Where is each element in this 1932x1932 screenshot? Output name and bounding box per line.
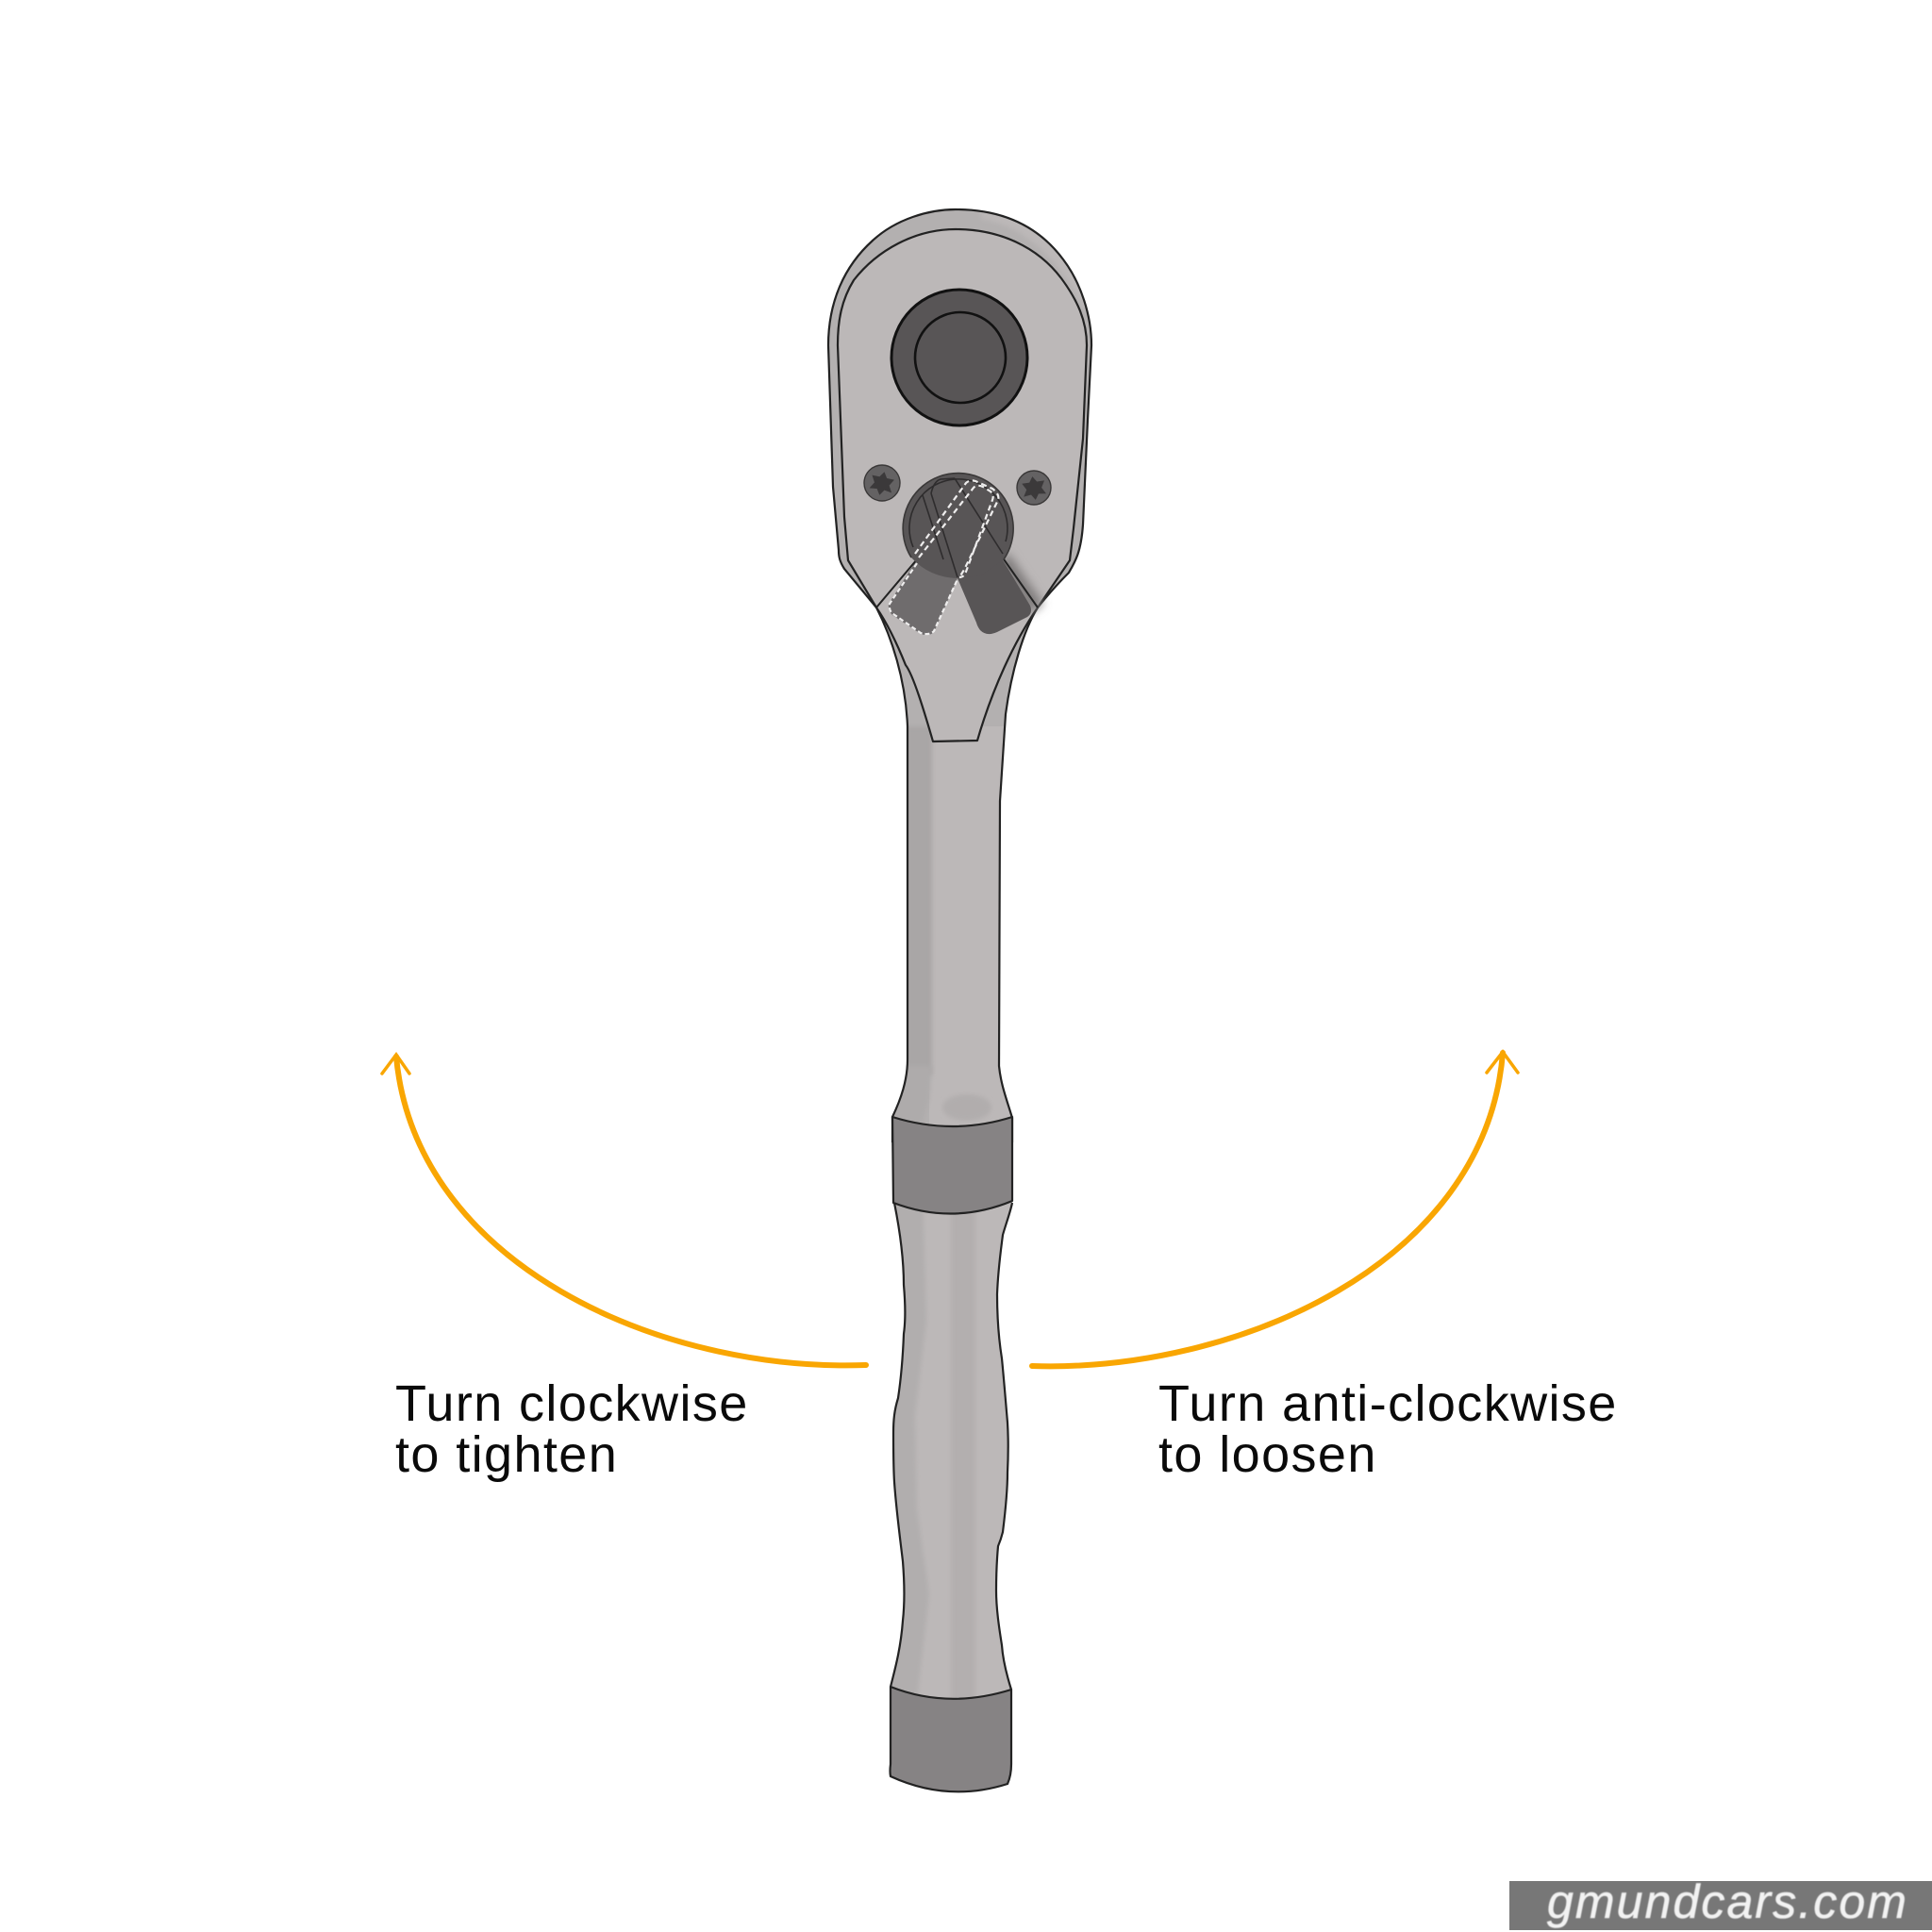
right torx screw bbox=[1017, 471, 1051, 505]
socket drive bbox=[891, 290, 1027, 425]
shadow of direction lever bbox=[1000, 552, 1043, 613]
label: anti-clockwise: Turn anti-clockwise bbox=[1158, 1375, 1618, 1432]
head face plate bbox=[838, 229, 1087, 741]
dark lever bbox=[958, 538, 1031, 634]
wrench head and shaft body bbox=[828, 203, 1099, 1146]
label: clockwise: Turn clockwise bbox=[395, 1375, 749, 1432]
left torx screw bbox=[864, 465, 900, 501]
label: clockwise: to tighten bbox=[395, 1426, 618, 1483]
selector knob bbox=[903, 474, 1013, 578]
arrow: clockwise bbox=[382, 1055, 866, 1365]
light lever position, dashed outline bbox=[889, 559, 958, 635]
first collar bbox=[892, 1117, 1012, 1214]
arrow: anti-clockwise bbox=[1032, 1052, 1518, 1366]
watermark: gmundcars.com bbox=[1547, 1875, 1908, 1928]
label: anti-clockwise: to loosen bbox=[1158, 1426, 1377, 1483]
ratchet wrench bbox=[828, 203, 1099, 1791]
lever notch edges bbox=[876, 557, 1038, 608]
grip handle bbox=[890, 1202, 1013, 1698]
dashed lever ghost lines bbox=[915, 480, 998, 577]
end cap bbox=[891, 1687, 1011, 1791]
